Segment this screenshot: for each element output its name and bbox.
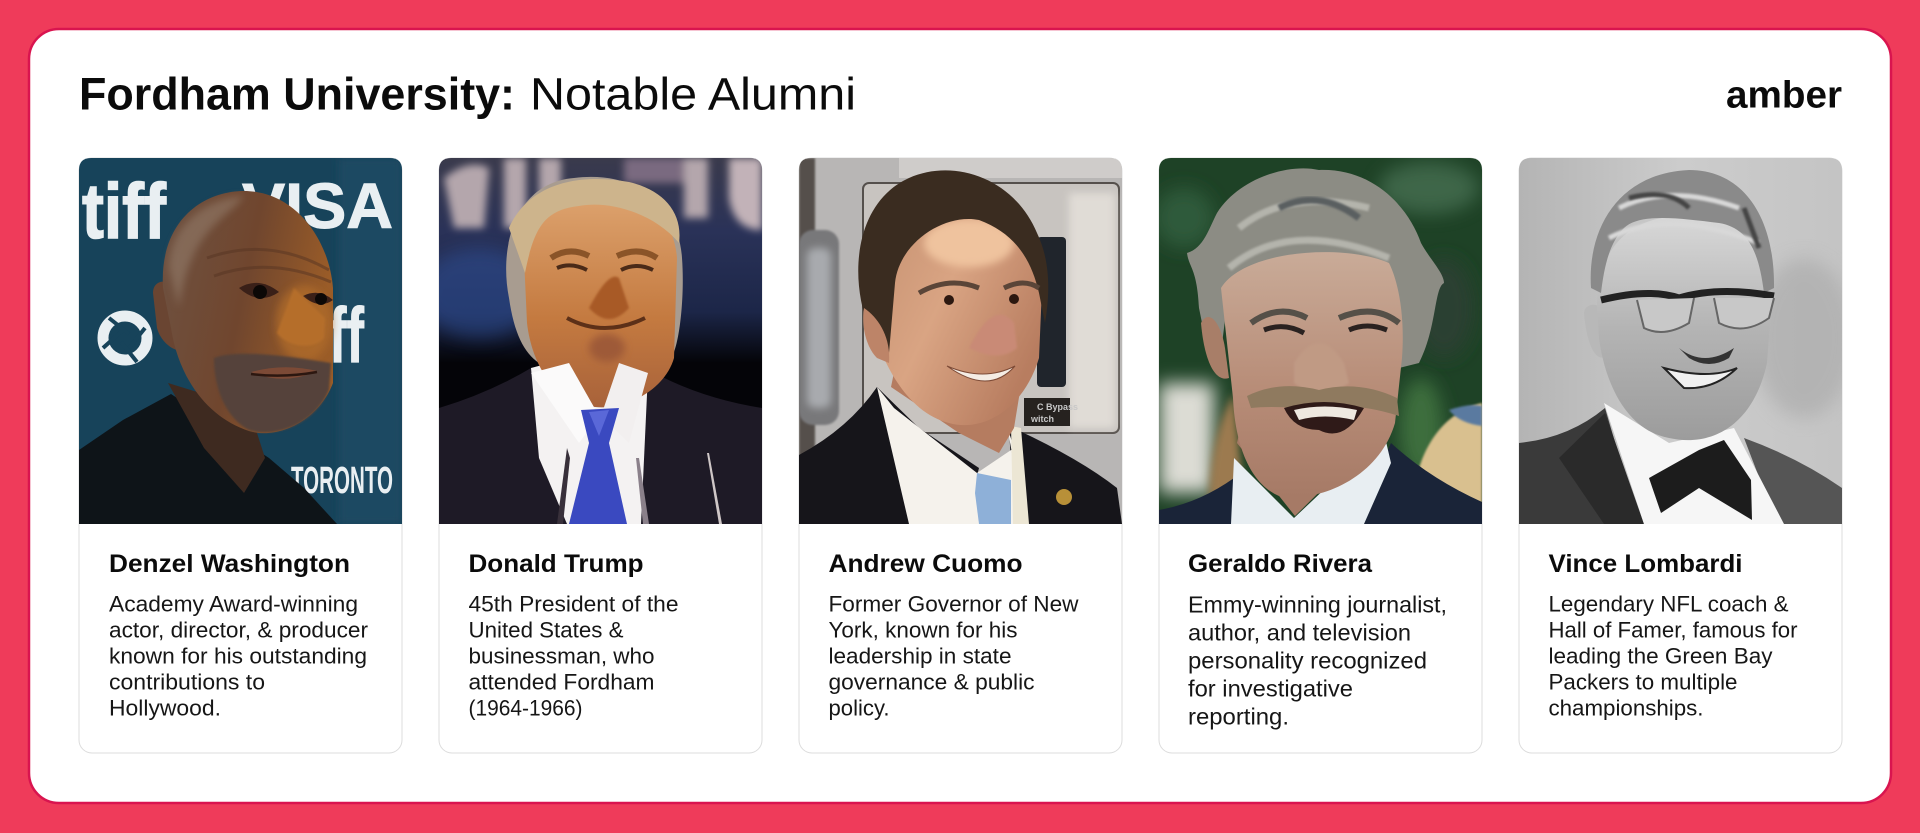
description: Geraldo Rivera: author, and television xyxy=(1188,620,1411,646)
portrait: Denzel Washington xyxy=(79,158,402,524)
panel: Geraldo Rivera card xyxy=(1154,158,1482,753)
name: Denzel Washington: Denzel Washington xyxy=(109,550,350,578)
title: Fordham University: xyxy=(79,68,515,120)
portrait: Denzel Washington: TORONTO xyxy=(291,460,393,502)
description: Geraldo Rivera: for investigative xyxy=(1188,676,1353,702)
name: Andrew Cuomo: Andrew Cuomo xyxy=(828,550,1022,578)
description: Geraldo Rivera xyxy=(1188,592,1447,730)
description: Andrew Cuomo: leadership in state xyxy=(828,644,1012,669)
panel: Donald Trump card xyxy=(419,158,762,753)
panel: Andrew Cuomo card xyxy=(799,158,1122,753)
description: Andrew Cuomo: policy. xyxy=(828,696,890,721)
portrait: Denzel Washington: tiff xyxy=(82,167,167,255)
portrait: Vince Lombardi xyxy=(1519,158,1854,524)
description: Geraldo Rivera: reporting. xyxy=(1188,704,1289,730)
description: Donald Trump: United States & xyxy=(468,618,624,643)
description: Andrew Cuomo xyxy=(828,592,1079,721)
description: Donald Trump xyxy=(468,592,678,721)
name: Donald Trump: Donald Trump xyxy=(468,550,644,578)
description: Donald Trump: (1964-1966) xyxy=(468,696,582,721)
portrait: Andrew Cuomo: C Bypass xyxy=(1037,402,1078,412)
description: Denzel Washington: Hollywood. xyxy=(109,696,221,721)
portrait: Denzel Washington: L xyxy=(91,454,107,484)
description: Denzel Washington: Academy Award-winning xyxy=(109,592,358,617)
description: Denzel Washington xyxy=(109,592,368,721)
description: Vince Lombardi: Legendary NFL coach & xyxy=(1548,592,1788,617)
description: Donald Trump: businessman, who xyxy=(468,644,654,669)
description: Geraldo Rivera: personality recognized xyxy=(1188,648,1427,674)
description: Vince Lombardi: championships. xyxy=(1548,696,1704,721)
description: Vince Lombardi: leading the Green Bay xyxy=(1548,644,1773,669)
portrait: Denzel Washington: ff xyxy=(329,291,365,379)
description: Vince Lombardi xyxy=(1548,592,1798,721)
description: Geraldo Rivera: Emmy-winning journalist, xyxy=(1188,592,1447,618)
description: Denzel Washington: contributions to xyxy=(109,670,265,695)
title: Notable Alumni xyxy=(530,68,856,120)
name: Geraldo Rivera: Geraldo Rivera xyxy=(1188,550,1373,578)
logo: amber: amber xyxy=(1726,74,1842,116)
description: Donald Trump: 45th President of the xyxy=(468,592,679,617)
portrait: Denzel Washington: VISA xyxy=(242,170,393,242)
portrait: Andrew Cuomo xyxy=(799,158,1122,524)
portrait: Geraldo Rivera xyxy=(1154,158,1482,524)
description: Andrew Cuomo: Former Governor of New xyxy=(828,592,1079,617)
description: Andrew Cuomo: York, known for his xyxy=(828,618,1018,643)
description: Vince Lombardi: Hall of Famer, famous for xyxy=(1548,618,1798,643)
description: Andrew Cuomo: governance & public xyxy=(828,670,1034,695)
panel: Denzel Washington card xyxy=(79,158,402,753)
portrait: Donald Trump xyxy=(419,158,762,524)
description: Denzel Washington: actor, director, & producer xyxy=(109,618,368,643)
title xyxy=(79,68,856,120)
name: Vince Lombardi: Vince Lombardi xyxy=(1548,550,1742,578)
panel: Vince Lombardi card xyxy=(1519,158,1854,753)
portrait: Andrew Cuomo: witch xyxy=(1030,414,1054,424)
description: Denzel Washington: known for his outstanding xyxy=(109,644,367,669)
description: Vince Lombardi: Packers to multiple xyxy=(1548,670,1738,695)
description: Donald Trump: attended Fordham xyxy=(468,670,654,695)
